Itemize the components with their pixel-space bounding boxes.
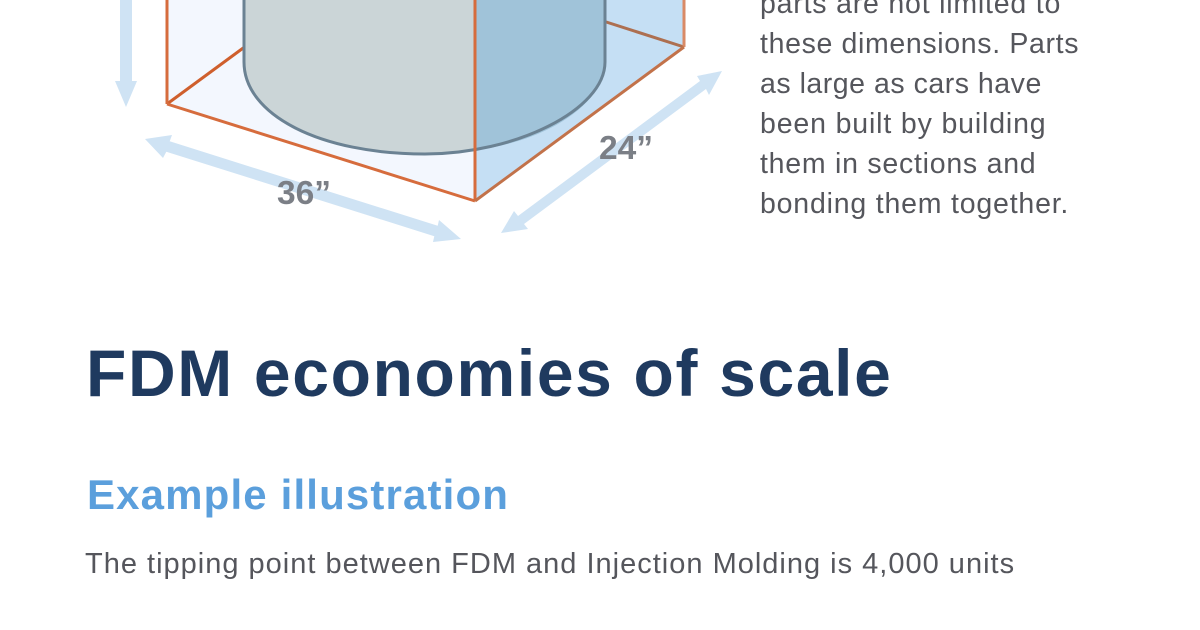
side paragraph: these dimensions. Parts	[760, 28, 1079, 60]
label: 36 inch: 36”	[277, 175, 331, 212]
side paragraph: bonding them together.	[760, 188, 1069, 220]
arrow: 24 inch depth	[501, 71, 722, 233]
heading: FDM economies of scale	[86, 336, 893, 410]
arrow: height	[115, 0, 137, 107]
build volume outline	[167, 0, 684, 201]
side paragraph: them in sections and	[760, 148, 1036, 180]
arrow: 36 inch width	[145, 135, 461, 242]
side paragraph: been built by building	[760, 108, 1046, 140]
build volume diagram	[115, 0, 722, 242]
cylinder part	[244, 0, 605, 154]
side paragraph: as large as cars have	[760, 68, 1042, 100]
side paragraph	[760, 0, 1079, 220]
left face of build volume	[167, 0, 475, 201]
body text: The tipping point between FDM and Injection Molding is 4,000 units	[85, 548, 1015, 580]
right face of build volume	[475, 0, 684, 201]
label: 24 inch: 24”	[599, 130, 653, 167]
subheading: Example illustration	[87, 471, 509, 518]
rear floor edges	[167, 20, 684, 104]
